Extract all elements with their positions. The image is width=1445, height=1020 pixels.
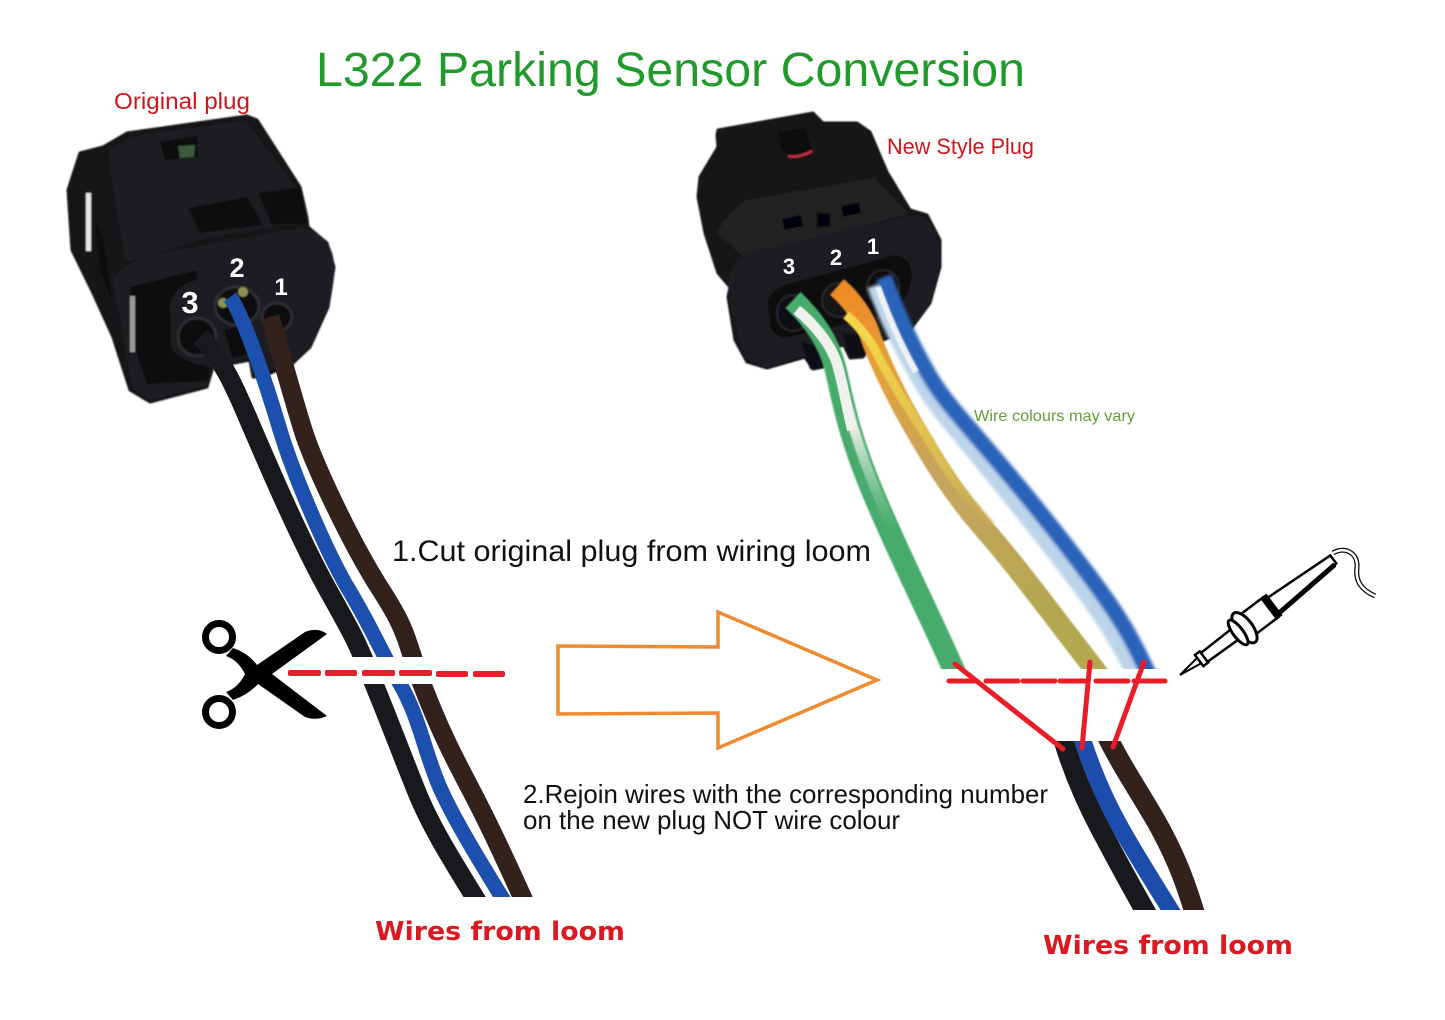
blades	[226, 630, 327, 719]
plug pin numbers: 2	[830, 245, 842, 270]
wires from loom label right: Wires from loom	[1043, 931, 1293, 961]
window	[160, 136, 198, 160]
plug top	[108, 120, 303, 262]
step 2 text: on the new plug NOT wire colour	[523, 807, 900, 835]
left recess	[130, 270, 210, 384]
scissors icon	[206, 624, 327, 726]
wire: blue and white	[876, 277, 1154, 685]
step 2 text: 2.Rejoin wires with the corresponding number	[523, 781, 1048, 809]
wire: brown	[1103, 728, 1200, 930]
handles	[206, 624, 232, 650]
plug pin numbers: 1	[274, 274, 288, 301]
grip	[1240, 597, 1278, 635]
plug body	[698, 113, 940, 369]
link: wire 3	[955, 664, 1063, 749]
plug body	[68, 116, 334, 402]
lower right loom wires	[1054, 741, 1204, 910]
wire: black	[200, 337, 495, 930]
locking tabs	[800, 340, 824, 369]
orange arrow	[558, 612, 877, 748]
pin holes	[777, 295, 809, 331]
title: L322 Parking Sensor Conversion	[316, 44, 1025, 97]
side window	[95, 220, 112, 300]
wire: green and white	[793, 300, 960, 684]
wire: black	[1054, 741, 1156, 910]
wire: brown	[270, 317, 535, 925]
wire: orange and yellow	[837, 287, 1106, 684]
latch squares	[782, 215, 803, 230]
tip	[1178, 657, 1202, 678]
dashed join line	[949, 678, 1165, 684]
mid band	[717, 178, 908, 258]
step 1 text: 1.Cut original plug from wiring loom	[392, 535, 871, 568]
join lines	[949, 662, 1165, 749]
front face	[728, 215, 940, 368]
cable	[1333, 550, 1375, 596]
left wires from original plug	[200, 297, 535, 930]
collar	[1227, 608, 1262, 647]
plug pin numbers: 3	[181, 285, 199, 320]
new style plug	[698, 113, 940, 369]
plug pin numbers	[181, 234, 879, 320]
slots	[188, 197, 263, 233]
wire cut gap	[335, 657, 445, 684]
link: wire 1	[1113, 662, 1144, 747]
tab hole	[778, 128, 812, 157]
new plug wires	[793, 277, 1154, 685]
note: wire colours: Wire colours may vary	[974, 408, 1135, 425]
original plug	[68, 116, 334, 402]
soldering iron icon	[1170, 546, 1375, 690]
white edge	[86, 193, 91, 251]
label: new style plug: New Style Plug	[887, 134, 1034, 159]
pin holes	[178, 318, 216, 356]
wire stripe: white on blue	[878, 287, 916, 372]
label: original plug: Original plug	[114, 88, 250, 114]
front face	[113, 228, 334, 400]
plug pin numbers: 2	[229, 253, 245, 283]
handle	[1267, 552, 1339, 613]
wires from loom label left: Wires from loom	[375, 917, 625, 947]
wire: blue	[230, 297, 522, 930]
shaft	[1195, 625, 1243, 666]
plug pin numbers: 1	[867, 234, 879, 259]
wire: blue	[1074, 741, 1180, 910]
recess	[768, 255, 912, 338]
step 2 text	[523, 781, 1048, 835]
link: wire 2	[1082, 662, 1090, 748]
cut line	[288, 670, 505, 677]
plug pin numbers: 3	[783, 254, 795, 279]
